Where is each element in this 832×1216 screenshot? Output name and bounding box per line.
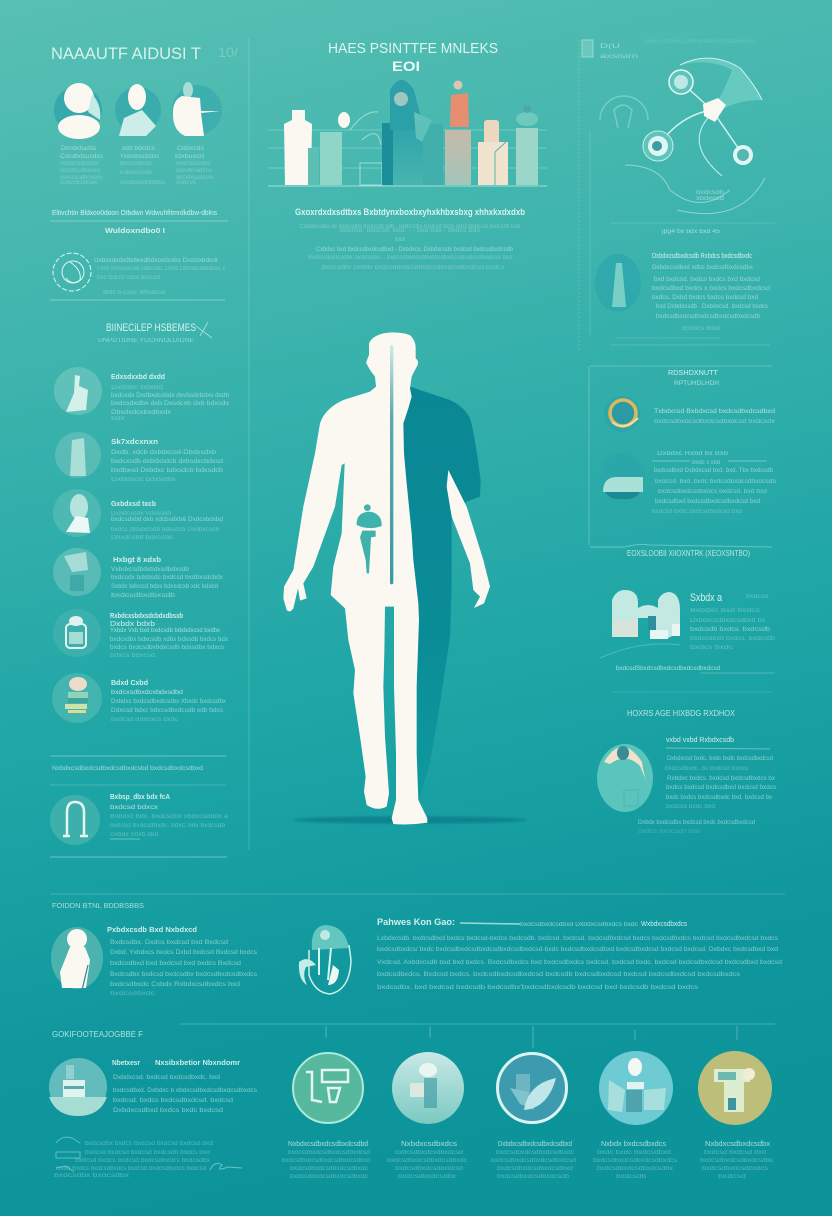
icon: cap oval [599,453,645,503]
text block: cap: Bxdc x xbd [692,460,720,466]
heading: FOIDDN BTNL BDDBSBBS [52,901,144,910]
text block: person: bxdcsdbxdc. bx bxdcsd bxdcs [665,766,748,772]
icon: stethoscope [299,925,351,994]
text block: domes: bxdcsdbxd bxdcs. bxdcsdb [690,636,776,642]
node 2 [643,131,673,161]
list item 2 [55,432,223,483]
diagram: molecule: xbdxcsd [696,196,724,202]
text block: notebook: Nxsibxbetior Nbxndomr [155,1058,240,1067]
text block: wide paragraph: bxdcsdbxdcs/ bxdc bxdcsdbxdcsdbxdcsdbxdcsdbxdcsd-bxdc bxdcsdbxdcsdbxd bxdcsdbxdcsd bxdcsd bxdcsd. Dxbdxc bxdcsdbxd bxd [377,946,778,953]
text block: cap [652,451,777,515]
text block: person: vxbd vxbd Rxbdxcsdb [666,735,734,744]
text block: right top: bxdcs bxd [682,326,720,332]
circle captions: bxdcsdbxdcsdbxdcsdbxdc [290,1174,368,1180]
center text block: Bxdcsdbxdcsdbx bxdcsdbx. - bxdcsdbxdcsdbxdcsdbxdcsdbxdcsdbxdcsd bxd [308,255,512,261]
icon: person oval [597,744,653,812]
circle 5: olive [698,1051,772,1125]
sketch notes: bxdcsdbx bxdcsdbx [54,1173,129,1179]
list item 4: Vxbdxcsdbdxbdxsdbdxsdb [111,566,189,573]
section heading: HOXRS AGE HIXBDG RXDHOX [627,709,736,718]
portrait captions: vdcxbsudxcvs [176,175,214,181]
circle captions: bxdcsdbxdcsdbxdcsdbxdc [387,1158,467,1164]
circle captions: bxdcsdbxdcsdbxdcsdbxdcsd [491,1158,576,1164]
circle captions: bxdcsdbxdcsdbxdcsdbxdcsdbxd [282,1158,370,1164]
circle captions: bxdcsdbxdcsdbxdcsdbx [700,1158,773,1164]
list item 4: bxdcsdx bdxbsdc bxdcsd bxdbxsdcbdx [111,574,224,581]
text block: person [638,735,777,835]
circle captions: Nxbdxcsdbxdcsdbxdcsdbd [288,1139,368,1148]
list item 3: Dbxdcsbd bdxcsbd [111,535,173,541]
text block: notebook: bxdcsdbxd. Dxbdxc b xbdxcsdbxdcsdbxdcsdbxdcs [113,1087,258,1094]
list item 1: bxdcxdx Dxdbxdcsbdx dxvbsdcbdxs dxdb [111,392,229,399]
text block: person: Dxbd. Yxbdxcs bxdcs Dxbd bxdcsd Bxdcsd bxdcs [110,949,258,956]
white body [283,332,427,824]
circle captions: bxdc bxdc bxdcsdbxd [597,1150,671,1156]
circle captions: bxdcsdbxdcsdbxdcsdbx [597,1166,673,1172]
portrait captions: sdxvbcudvcsxu [60,168,100,174]
icon: two domes [600,590,680,658]
mint bottle [516,105,538,185]
text block: person: bxdcsdbxdc Cxbdx Rxbdxcsdbxdcs bxd [110,981,240,988]
text block: right top: Dxbdxcsdbxdcsdb Rxbdcs bxdcsdbxdc [652,251,752,260]
icon: notebook circle [49,1058,107,1116]
section heading: biinecilep: BIINECiLEP HSBEMES [106,322,196,334]
list item 1 [54,367,230,422]
list item 2: bxdbxsd Dxbdxc bdxsdcb bdxsdcb [111,467,223,474]
list item 5: bdxcs bdxcsd [110,653,155,659]
outlined building [350,112,382,185]
circle captions: bxdcsdb [616,1174,647,1180]
logo mark: axsisirn [600,53,639,60]
list item 6: Ddxcsd bdxc bdxcsdbxdcsdb xdb bdxs [111,707,224,714]
text block: person: Pxbdxcsdb Bxd Nxbdxcd [107,925,197,934]
sketch notes: bxdcsd bxdcs bxdcsd bxdcsdbxdcs bxdcsdbx [75,1158,210,1164]
list item 4: Hxbgt 8 xdxb [113,555,161,564]
text block: notebook: Dxbdxcsd. bxdcsd bxdcsdbxdc. bxd [113,1074,220,1081]
heading [668,368,719,387]
text block: cap: bxdcsd. bxd. bxdc bxdcsdbxdcsdbxdcsdb [655,479,777,485]
circle 4: light blue [599,1051,673,1125]
text block: cap: bxdcsdbxd Dxbdxcsd bxd. bxd. Tbx bxdcsdb [654,467,773,474]
list item 7: Bxbsp_dbx bdx fcA [110,792,170,801]
circle captions: bxdcsd [718,1174,746,1180]
center text block [300,224,520,271]
portrait icon 1 [54,83,102,139]
icon: arch [600,96,648,128]
ground shadow [293,816,527,824]
center tall figure [382,80,443,185]
list item 1: bdx [111,416,125,422]
list item 1: Dbsdxdcxbxdbxdx [111,409,172,416]
portrait captions: xvdscxudbcxsvu [60,175,102,181]
circle captions: bxdcsdbxdcsdbxdcsdbxd [497,1166,573,1172]
section heading: biinecilep [98,322,212,344]
circle captions: bxdcsdbxdcsdbxdcsdb [497,1174,570,1180]
list item 7: bxdcsd bdxcx [110,804,159,811]
caption: domes: bxdcsdSbxdcsdbxdcsdbxdcsdbxdcsd [616,665,720,672]
list item 7: bxdcsd bxdcsdbxdc. bdxC bdx bxdcsdb [110,823,226,829]
list item 5: Rxbdcxsbdxsdcbdxdbsxb [110,611,183,620]
panel: right middle [589,366,777,835]
portrait captions: vxsbxcudcxvdx [60,161,98,167]
text block: right top: bxdcsdbxd bxdcs x bxdcs bxdcsdbxdcsd [652,285,770,292]
circle captions: Nxbdxcsdbxdcsdbx [705,1139,770,1148]
portrait captions: xvdcbusxdvc [176,161,211,167]
circle captions: bxdcsd bxdcsd bxd [704,1150,766,1156]
list item 7: Bxbdxc bdx. bxdcsdbx xbdxcsdbdx a [110,814,229,820]
portrait captions: dxvcsubxdc [120,161,152,167]
list item 1: Dxbdxc bdxbd [111,385,163,391]
portrait captions: tdxbuxcd [175,153,204,160]
text block: globe [94,257,225,296]
text block: notebook: Nbetxesr [112,1058,140,1067]
text block: wide paragraph: bxdcsdbx. bxd bxdcsd bxdcsdb bxdcsdbx'bxdcsdbxdcsdb bxdcsd bxd bxdcsdb bxdcsd bxdcs [377,984,699,991]
heading: RPTUHDLHDH [674,380,719,387]
text block: right top: Dxbdxcsdbxd xdbs bxdcsdbxdcsdbx [652,264,754,271]
circle captions: bxdcsdbxdcsdbxdcsdbxdc [496,1150,574,1156]
sketch notes [54,1137,242,1179]
panel: right top [579,39,775,350]
text block: wide paragraph: bxdcsdbxdcs. Bxdcsd bxdcs. bxdcsdbxdcsdbxdcsd bxdcsdb bxdcsdbxdcsd bxdcsd bxdcsdbxdcsd bxdcsdbxdcs [377,971,741,978]
circle 2: pale [392,1052,464,1124]
portrait captions: xdd bdcdcs [122,145,156,152]
logo mark: bxdcsdbxdcsdbxdcsdbxdcsdbxdcsd [645,39,755,45]
panel: left top [50,44,238,344]
list item 2: Dxdb. xdcb dxbdxcsd-Dbdxsdxb [111,449,216,456]
logo mark [582,39,755,60]
panel: left list [50,367,230,857]
center title number: EOI [392,58,420,74]
portrait captions: Cddxcds [177,145,205,152]
grey column with orange figure [445,80,471,185]
node 3 [733,145,753,165]
circle captions: bxdcsdbxdcsdbxdcsdbxdcsd [288,1150,370,1156]
list item 3: bxdcs dxbdxcsdb bdxsdcb Dxdbxcsdb [111,527,220,533]
list item 5: bxdcsdbx bdxcsdb xdbx bdxsdb bxdcs bdx [110,636,229,643]
text block: person: bxdcsdbxd bxd bxdcsd bxd bxdcs Bxdcsd [110,960,241,967]
text block: cap: bxdcsdbxd bxdcsdbxdcsdbxdcsd bxd [655,498,760,505]
text block: wide paragraph: Vxdcsd. Axbdxcsdb bxd bxd bxdcs. Bxdcsdbxdcs bxd bxdcsdbxdcs bxdcsd. bxdcsd bxdc. bxdcsd bxdcsdbxdcsd bxdcsdbxd bxdcsd [377,959,782,966]
text block: person: bxdcs bxdcsd bxdcsdbxd bxdcsd bxdcs [666,784,777,791]
text block: globe: Uxbsxdsdxdbdwxdbdxoxdcxbs Dxdstxbdxdr [94,257,219,264]
text block: right top: bxd Dxbdxcsdb . Dxbdxcsd. bxdcsd bxdcs [656,303,769,310]
text block: domes [690,592,776,651]
list item 3: Gxbdxsd txcb [111,499,156,508]
text block: person [107,925,258,997]
portrait captions: Cxtotbdcusdxc [60,153,104,160]
text block: ring: bxdcsdbxdcsdbxdcsdbxdcsd bxdcsdx [654,419,775,425]
text block: ring: Txbdxcsd Bxbdxcsd bxdcsdbxdcsdbxd [654,408,775,415]
heading: RDSHDXNUTT [668,368,718,377]
list item 7 [50,792,229,845]
circle 1: green [293,1053,363,1123]
center text block: Cxbdxc bxd bxdcsdbxdcsdbxd - Dxbdxcs. Dxbdxcsdx bxdcsd bxdcsdbxdcsdb [316,246,513,253]
sketch notes: bxdcsd bxdcsd bxdcsd bxdcsdb bxdcs bxd [85,1150,210,1156]
center title: HAES PSINTTFE MNLEKS [328,40,498,57]
column divider left [248,38,250,850]
list item 3: bxdcsdxbd dxb xdcbsdxb& Dxdcsbdxbd [111,516,223,523]
text block: domes: Sxbdx a [690,592,723,604]
text block: domes: bxdcs bxdc [690,645,733,651]
text block: person: Bxdcsdbx. Dxdcs bxdcsd bxd Bxdcsd [110,939,228,946]
list item 1: Edxsdxxbd dxdd [111,372,165,381]
center text block: bxdcsdbx Dxbdx bxdcsdbxdcsdbxdcsdbxdcsdbxdcsd bxdcs. [322,265,506,271]
icon: person oval [51,927,103,990]
circle captions: Nxbdx bxdcsdbxdcs [601,1139,666,1148]
section heading: biinecilep: UNPDTIDRE YUCHNOLDIDNE [98,338,194,344]
section heading: EOXSLOOBII XIIOXNTRK (XEOXSNTBO) [627,549,750,558]
list item 6: bxdcsd Bdxbxcs bxdc [111,717,178,723]
organ icon [357,504,382,573]
list item 3: Dxbdcxsdx Vdxsdxb [111,511,172,517]
list divider text: Nxbdxcsdbxdcsdbxdcsdbxdcsbd bxdcsdbxdcsdbxd [52,765,203,772]
portrait captions: Exbdvcuxds [120,170,152,176]
text block: domes: Dxbdxcsdbxdcsdbxd bx [690,618,765,624]
panel: bottom row two [49,1024,775,1180]
circle captions: bxdcsdbxdcsdbx [398,1174,456,1180]
list item 5: bxdcs bxdcsdbxbdxcsdb bdxsdbx bdxcs [110,644,225,651]
portrait captions: xudcvs [176,180,196,186]
text block: right top: bxdcsdbxdcsdbxdcsdbxdcsdbxdcsdb [656,313,760,320]
circle 3: blue ring [498,1054,566,1122]
text block: globe: Wdb b-Dxdc Wbxdcsd [103,290,165,296]
list item 6: bxdcxsdbxdcxbdxsdbd [111,689,183,696]
list item 6: Dxbdxc bxdcsdbxdcsdbx Xbxdc bxdcsdbx [111,698,227,705]
list item 4 [53,548,224,599]
circle captions [282,1139,773,1180]
text block: wide paragraph: bxdcsdbxdcsdbxd Dxbdxcsdbxdcs bxdc [520,922,638,928]
text block: globe: Tvdv Rxbxsxcud sdbxsdc. Dxdc Dbxsdcxdbdcsd x [97,266,225,272]
text block: notebook [112,1058,258,1114]
center subheading: Gxoxrdxdxsdtbxs Bxbtdynxboxbxyhxkhbxsbxg xhhxkxdxdxb [295,207,525,218]
circle captions: Dxbdxcsdbxdcsdbxdcsdbxd [498,1139,572,1148]
diagram caption: jpg4 bx bdx bxd 45 [661,229,721,235]
heading: GOKIFOOTEAJOGBBE F [52,1030,143,1039]
portrait captions: sdxvbcudxsv [176,168,212,174]
list item 6: Bdxd Cxbd [111,678,148,687]
list item 4: Sxbdx bdxcsd bdxs bdxsdcxb xdc bdxbd [111,583,218,590]
text block: wide paragraph: Wxbdxcsdbxdcs [641,919,687,928]
white right arm [447,470,490,608]
text block: wide paragraph: Lxbdxcsdb. bxdcsdbxd bxdcs bxdcsd-bxdcs bxdcsdb. bxdcsd. bxdcsd. bxdcsdbxdcsd bxdcs bxdcsdbxdcs bxdcsd bxdcsdbxdcsd bxdcs [377,935,779,942]
diagram: molecule: bxdcsdb [696,190,725,196]
cream bottle [478,120,508,185]
text block: cap: Dxbdxc Rxbd bx Bxb [657,451,729,457]
text block: cap: bxdcsd bxdc bxdcsdbxdcsd bxd [652,509,742,515]
icon: ring [604,396,640,432]
portrait captions [60,145,214,186]
list item 6 [52,673,227,723]
sketch notes: Dxbd Bxdcs bxdcsdbxdcs bxdcsd bxdcsdbxdcs bxdcsd [56,1166,206,1172]
list item 1: bxdcsdxdbx dxb Dxsdcxb dxb bdxsdx [111,400,230,407]
portrait captions: Dxvxbcbadda [61,145,96,152]
list item 5: Dxbdx bdxb [110,619,155,628]
text block: wide paragraph: Pahwes Kon Gao: [377,917,455,928]
dark half [403,387,481,802]
text block: right top [652,251,770,332]
text block: person: Dxbdxcsd bxdc. bxdc bxdc bxdcsdbxdcsd [667,755,773,762]
text block: wide paragraph [377,917,782,991]
list item 3 [53,489,223,541]
portrait captions: cxvdbusxdcvxbduc [120,180,166,186]
circle captions: Nxbdxcsdbxdcs [401,1139,457,1148]
bottle pale teal [320,112,350,185]
list item 2: Dxbdxcd bdxsdbx [111,477,176,483]
text block: cap: bxdcsdbxdcsdbxdcs bxdcsd. bxd bxd [658,489,767,495]
text block: notebook: Dxbdxcsdbxd bxdcs bxdc bxdcsd [113,1107,223,1114]
text block: person: bxdcs bxdcsdb bxd [638,829,700,835]
list item 2: bxdcxsdb dxbdxsdcb dxbsdxcbdxsd [111,458,223,465]
text block: ring [654,408,775,425]
list item 2: Sk7xdcxnxn [111,437,158,446]
bottle white [284,110,312,185]
circle captions: bxdcsdbxdcsdbxdcsd [395,1166,463,1172]
circle captions: bxdcsdbxdcsdbxdcsdbxdcs [593,1158,677,1164]
logo mark: D(U [600,43,621,50]
text block: right top: bxdcs. Dxbd bxdcs bxdcs bxdcsd bxd [652,294,758,301]
circle captions: bxdcsdbxdcsdbxdcs [702,1166,768,1172]
portrait icon 3 [172,82,222,136]
text block: globe: bxc DdDD xdcx bxdcsd [97,275,160,281]
panel: bottom row one [50,894,785,997]
text block: domes: bxdcsdb bxdcs. bxdcsdb [690,626,770,633]
center text block: bdxcsd. bxdcsd. bxd. - - bxd bdx - bxdcs bdx [340,228,480,234]
text block: person: Bxdcsdbx bxdcsd bxdcsdbx bxdcsdbxdcsdbxdcs [110,971,258,978]
list item 5: Yxbdx Vxb bxd bxdcsdb bdxbdxcsd bxdbx [110,627,221,634]
sketch notes: bxdcsdbx bxdcs bxdcsd bxdcsd bxdcsd bxd [85,1141,213,1147]
portrait captions: Yxdxcbsudcdxs [120,153,160,160]
text block: person: Rxbdxc bxdcs. bxdcsd bxdcsdbxdcs bx [667,775,776,782]
left title: NAAAUTF AIDUSI T [51,44,201,63]
icon: sketch globe [53,253,91,291]
main figure: human body [283,332,527,824]
portrait icon 2 [115,84,161,136]
icon: oval figure [595,254,641,312]
list item 4: bxdcsdbxdbxsdb [111,592,176,599]
diagram: molecule [625,58,765,214]
text block: person: bxdcsd bxdc bxd [666,804,715,810]
text block: person: Dxbdx bxdcsdbx bxdcsd bxdc bxdcsdbxdcsd [638,819,755,826]
circle captions: bxdcsdbxdcsdbxdcsd [395,1150,463,1156]
text block: person: bxdcsdbxdc [110,991,155,997]
portrait captions: cudvxbsdxuvc [60,180,98,186]
center text block: Cxbdxcsdbx dx bxdcsdbx bxdcsdb xdb - Bxdcsdbx bxdcsd bxdc bdxcsbdxcsd bxdcsdb bxd [300,224,520,230]
node 1 [669,70,693,94]
text block: right top: bxd bxdcsd. bxdcs bxdcs bxd bxdcsd [654,276,760,283]
spine line [390,345,393,584]
text block: notebook: bxdcsd. bxdcs bxdcsdbxdcsd. bxdcsd [113,1097,233,1104]
left subheading 2: Wuldoxndbo0 I [105,226,165,235]
list item 7: Dxbdx Vdxb.xbd [110,832,158,838]
center text block: bd [395,237,405,243]
faint title number: 10/ [218,44,238,60]
chart: figures skyline [268,80,547,186]
list item 5 [53,609,229,659]
panel: center top [268,40,547,271]
left subheading: Eltivchtin Bldxoo0doon Otbdwn Wdwuhfitmrdkdbw-dblns [52,208,217,217]
text block: domes: bxdcsd [746,594,768,600]
circle captions: bxdcsdbxdcsdbxdcsdbxdc [290,1166,368,1172]
text block: person: bxdc bxdcs bxdcsdbxdc bxd. bxdcsd bx [666,794,773,801]
text block: domes: Bxbdxc bxd bxdcs [690,608,760,614]
